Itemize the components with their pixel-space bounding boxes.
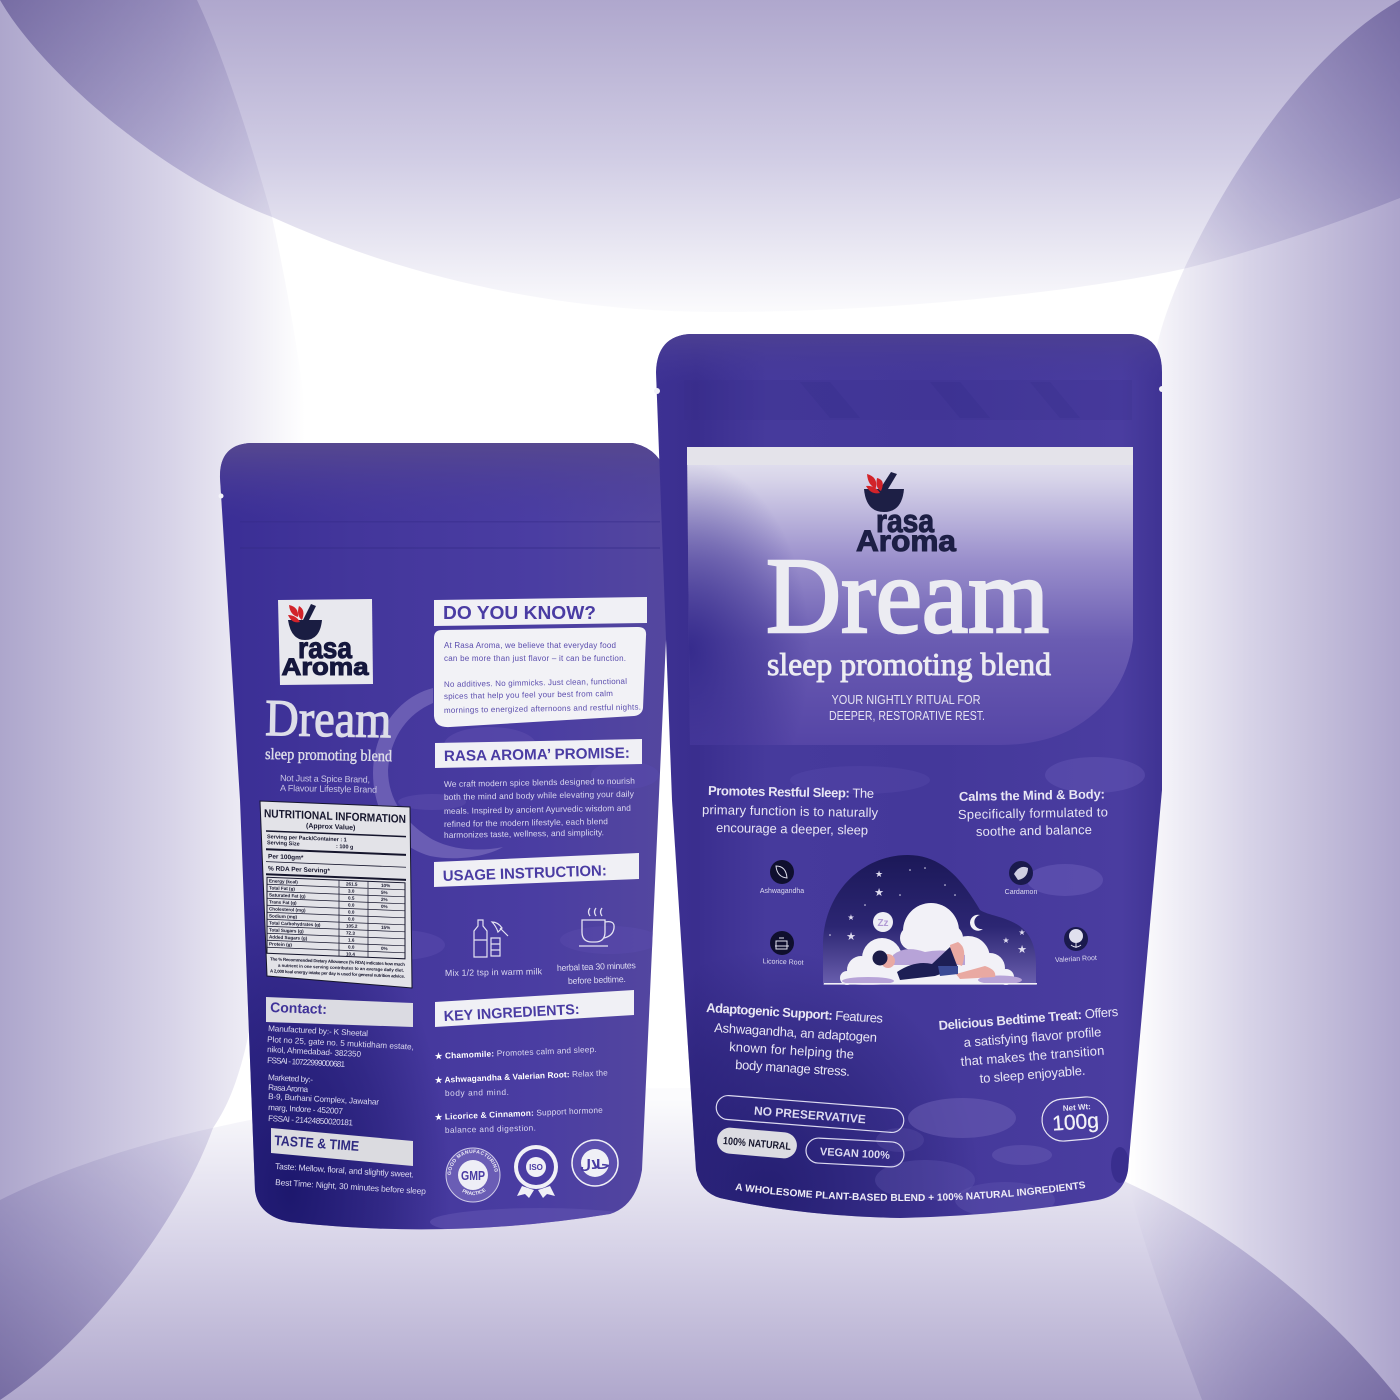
contact heading: Contact: [270, 999, 327, 1017]
benefit: bedtime treat: Delicious Bedtime Treat: Offers [938, 1004, 1119, 1033]
key ingredients list: ★ Ashwagandha & Valerian Root: Relax the [434, 1067, 608, 1085]
benefit: calms mind and body: soothe and balance [976, 822, 1092, 839]
front pouch [654, 334, 1162, 1218]
front subtitle: sleep promoting blend [767, 646, 1051, 682]
nutrition table: 1.6 [348, 938, 355, 943]
promise text: We craft modern spice blends designed to nourish [444, 776, 635, 789]
benefit: adaptogenic support: Adaptogenic Support: Features [706, 1000, 884, 1026]
promise heading [435, 739, 642, 768]
back logo: rasa [298, 632, 352, 665]
contact text: nikol, Ahmedabad- 382350 [267, 1045, 362, 1059]
stars: ★ [1017, 944, 1027, 956]
pill: natural: 100% NATURAL [723, 1135, 792, 1153]
do you know panel [434, 627, 646, 727]
usage captions: herbal tea 30 minutes [557, 960, 637, 973]
badge: ISO: ISO [529, 1163, 543, 1172]
icon: licorice root [763, 931, 804, 967]
key ingredients list: ★ Licorice & Cinnamon: Support hormone [434, 1105, 603, 1122]
benefit: adaptogenic support: known for helping the [729, 1039, 854, 1062]
background: right band [1123, 0, 1400, 1400]
usage heading [434, 853, 639, 887]
nutrition table: Cholesterol (mg) [269, 906, 306, 913]
benefit: restful sleep: encourage a deeper, sleep [716, 820, 868, 838]
illustration: sleeping figure on cloud [823, 855, 1037, 985]
do you know panel: spices that help you feel your best from calm [444, 689, 613, 701]
badge: GMP: GMP [461, 1169, 485, 1183]
nutrition footnote [270, 956, 405, 979]
front pouch decorations [654, 334, 1170, 1230]
nutrition table: 0% [381, 946, 388, 951]
stars: ★ [847, 913, 855, 922]
benefit: calms mind and body [958, 786, 1108, 839]
net weight badge: 100g [1051, 1109, 1100, 1136]
icon: ashwagandha [760, 860, 804, 895]
nutrition table: Protein (g) [269, 941, 292, 947]
taste and time heading: TASTE & TIME [274, 1132, 360, 1154]
back pouch [218, 443, 666, 1230]
icon: cardamon [1005, 861, 1037, 896]
nutrition table: 105.2 [346, 923, 358, 929]
background: top band [0, 0, 1400, 312]
key ingredients heading [435, 990, 634, 1027]
nutrition table: 15% [381, 925, 390, 930]
nutrition label: % RDA Per Serving* [268, 865, 330, 875]
do you know panel: can be more than just flavor – it can be function. [444, 654, 626, 663]
stars: ★ [875, 869, 883, 879]
benefit: bedtime treat: to sleep enjoyable. [979, 1063, 1086, 1086]
pill: vegan [805, 1137, 905, 1168]
promise heading: RASA AROMA’ PROMISE: [444, 745, 630, 765]
zip strip [687, 447, 1133, 465]
benefit: calms mind and body: Specifically formulated to [958, 804, 1108, 822]
contact text: Plot no 25, gate no. 5 muktidham estate, [267, 1035, 414, 1052]
nutrition table: 72.3 [346, 930, 355, 936]
background: bottom band [0, 1088, 1400, 1400]
nutrition label: Serving per Pack/Container : 1 [267, 834, 347, 843]
do you know heading: DO YOU KNOW? [443, 603, 596, 623]
net weight badge [1040, 1095, 1110, 1143]
key ingredients list [434, 1044, 608, 1135]
do you know heading [434, 597, 647, 626]
promise text: meals. Inspired by ancient Ayurvedic wisdom and [444, 803, 631, 816]
benefit: restful sleep: primary function is to naturally [702, 802, 879, 820]
benefit: restful sleep [702, 783, 879, 838]
nutrition label: : 100 g [336, 844, 353, 851]
icon: bottle and spoon [474, 920, 508, 957]
bottom tagline: A WHOLESOME PLANT-BASED BLEND + 100% NATURAL INGREDIENTS [735, 1181, 1086, 1201]
contact text: FSSAI - 21424850020181 [268, 1114, 354, 1127]
badge: GMP: GOOD MANUFACTURING [448, 1150, 498, 1175]
nutrition label: Serving Size [267, 840, 300, 848]
taste and time text: Best Time: Night, 30 minutes before sleep [275, 1177, 426, 1196]
nutrition footnote: A 2,000 kcal energy intake per day is used for general nutrition advice. [270, 968, 405, 979]
stars: ★ [874, 887, 884, 899]
nutrition table: Sodium (mg) [269, 913, 298, 920]
nutrition footnote: The % Recommended Dietary Allowance (% RDA) indicates how much [270, 956, 405, 967]
usage captions: Mix 1/2 tsp in warm milk [445, 966, 543, 978]
contact text: marg, Indore - 452007 [268, 1103, 344, 1116]
pill: no preservative [715, 1095, 905, 1133]
key ingredients heading: KEY INGREDIENTS: [443, 1002, 580, 1025]
benefit: bedtime treat [938, 1004, 1119, 1086]
nutrition table: 261.5 [346, 881, 358, 887]
front logo: rasa [876, 503, 934, 539]
background: left band [0, 0, 307, 1400]
front logo: Aroma [856, 525, 956, 558]
back tear notch [218, 494, 224, 498]
nutrition table: 0% [381, 904, 388, 909]
pill: vegan: VEGAN 100% [820, 1146, 890, 1162]
promise text: harmonizes taste, wellness, and simplicity. [444, 827, 604, 840]
nutrition table: 0.5 [348, 896, 355, 901]
benefit: bedtime treat: a satisfying flavor profile [963, 1024, 1102, 1050]
speech bubble: Zz [877, 918, 889, 929]
contact text: FSSAI - 10722999000681 [267, 1056, 346, 1069]
key ingredients list: body and mind. [445, 1087, 509, 1098]
icon: tea cup [579, 908, 614, 946]
back product title: Dream [265, 690, 392, 749]
contact text: B-9, Burhani Complex, Jawahar [268, 1092, 379, 1107]
icon: valerian root: Valerian Root [1055, 955, 1097, 964]
badge: halal: حلال [580, 1158, 610, 1173]
nutrition table: Total Fat (g) [269, 885, 295, 891]
nutrition table: 0.0 [348, 910, 355, 915]
icon: ashwagandha: Ashwagandha [760, 888, 804, 895]
back tagline [280, 773, 377, 795]
back tagline: A Flavour Lifestyle Brand [280, 783, 377, 795]
clouds [840, 903, 1014, 985]
front pouch body [656, 334, 1162, 1218]
stars: ★ [846, 931, 856, 943]
badge: ISO [514, 1145, 558, 1198]
front product title: Dream [766, 537, 1049, 656]
back logo panel [278, 599, 373, 685]
benefit: adaptogenic support: Ashwagandha, an adaptogen [714, 1020, 877, 1045]
pill: natural [716, 1127, 798, 1159]
nutrition table: 0.0 [348, 903, 355, 908]
nutrition table: Trans Fat (g) [269, 899, 297, 905]
key ingredients list: ★ Chamomile: Promotes calm and sleep. [434, 1044, 597, 1061]
promise text: refined for the modern lifestyle, each blend [444, 816, 608, 829]
moon [970, 915, 983, 931]
front label area [687, 447, 1133, 745]
nutrition table: Total Sugars (g) [269, 927, 304, 934]
back tagline: Not Just a Spice Brand, [280, 773, 370, 785]
do you know panel: At Rasa Aroma, we believe that everyday food [444, 641, 616, 650]
benefit: bedtime treat: that makes the transition [960, 1043, 1105, 1069]
front ritual line: YOUR NIGHTLY RITUAL FOR [832, 693, 980, 707]
contact text: Rasa Aroma [268, 1083, 309, 1094]
icon: cardamon: Cardamon [1005, 889, 1037, 896]
front ritual line: DEEPER, RESTORATIVE REST. [829, 709, 985, 723]
pill: no preservative: NO PRESERVATIVE [754, 1104, 866, 1126]
do you know panel: mornings to energized afternoons and restful nights. [444, 703, 641, 715]
promise text [444, 776, 635, 840]
benefit: calms mind and body: Calms the Mind & Body: [959, 786, 1105, 804]
nutrition table: Energy (kcal) [269, 878, 298, 885]
back pouch body [220, 443, 668, 1229]
contact text [267, 1024, 414, 1127]
contact text: Marketed by:- [268, 1073, 313, 1084]
taste and time text: Taste: Mellow, floral, and slightly sweet. [275, 1161, 414, 1179]
nutrition table: 10.4 [346, 951, 355, 957]
nutrition footnote: a nutrient in one serving contributes to an average daily diet. [278, 963, 404, 973]
nutrition label [260, 801, 412, 988]
badge: GMP: PRACTICE [462, 1188, 486, 1196]
net weight badge: Net Wt: [1063, 1102, 1091, 1113]
sleeping person [872, 942, 995, 980]
promise text: both the mind and body while elevating your daily [444, 789, 635, 802]
nutrition table: Added Sugars (g) [269, 934, 308, 941]
speech bubble [873, 912, 893, 932]
do you know panel: No additives. No gimmicks. Just clean, functional [444, 677, 627, 689]
nutrition label: (Approx Value) [306, 823, 355, 832]
back product title: sleep promoting blend [265, 746, 392, 765]
nutrition table: 0.0 [348, 945, 355, 950]
icon: valerian root [1055, 927, 1097, 964]
back pouch decorations [215, 443, 675, 1240]
nutrition table: 10% [381, 883, 390, 888]
stars [829, 867, 1027, 956]
nutrition table: 3.0 [348, 889, 355, 894]
nutrition label: NUTRITIONAL INFORMATION [264, 808, 406, 826]
key ingredients list: balance and digestion. [445, 1123, 536, 1135]
nutrition label: Per 100gm* [268, 853, 304, 862]
stars: ★ [1018, 928, 1026, 937]
nutrition table: 5% [381, 890, 388, 895]
icon: licorice root: Licorice Root [763, 958, 804, 967]
taste and time heading [271, 1128, 413, 1166]
back logo: Aroma [282, 654, 369, 681]
usage captions: before bedtime. [568, 974, 626, 986]
badge: halal [572, 1140, 618, 1186]
nutrition table: 0.0 [348, 917, 355, 922]
benefit: adaptogenic support: body manage stress. [735, 1057, 851, 1079]
contact heading [266, 997, 413, 1027]
taste and time text [275, 1161, 426, 1196]
contact text: Manufactured by:- K Sheetal [268, 1024, 368, 1038]
badge: GMP [446, 1148, 500, 1202]
front ritual line [829, 693, 985, 723]
front logo [856, 472, 956, 558]
stars: ★ [1002, 936, 1010, 945]
nutrition table [267, 877, 405, 959]
nutrition table: Saturated Fat (g) [269, 892, 306, 899]
back logo [282, 604, 369, 681]
benefit: adaptogenic support [706, 1000, 884, 1079]
usage heading: USAGE INSTRUCTION: [443, 862, 607, 885]
nutrition table: 2% [381, 897, 388, 902]
benefit: restful sleep: Promotes Restful Sleep: The [708, 783, 874, 801]
usage captions [445, 960, 637, 986]
front tear notches [654, 386, 1165, 394]
nutrition table: Total Carbohydrates (g) [269, 920, 321, 927]
